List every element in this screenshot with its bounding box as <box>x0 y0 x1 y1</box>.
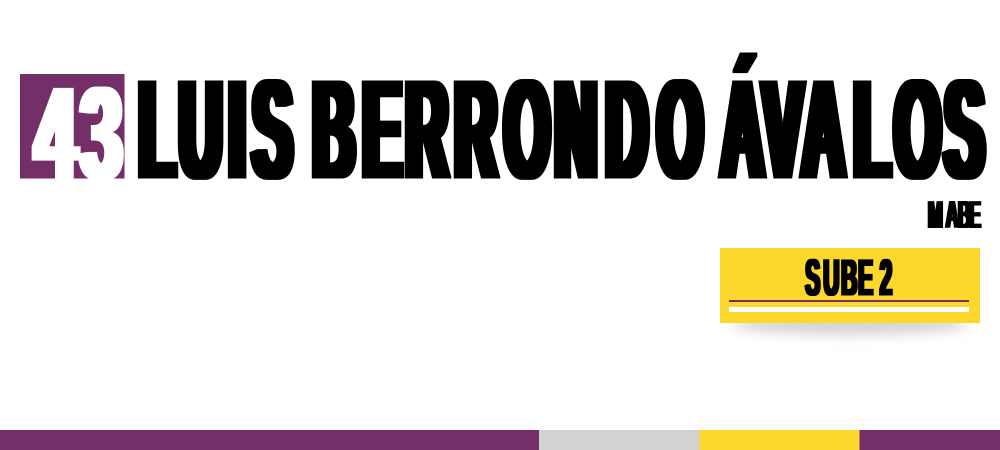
title: name: LUIS <box>139 50 292 208</box>
status ribbon: SUBE 2: SUBE 2 <box>805 250 892 307</box>
status ribbon: SUBE 2 <box>720 248 980 323</box>
bottom colour bar <box>0 430 1000 450</box>
party label: MABE: MABE <box>928 195 981 237</box>
ribbon shadow <box>732 313 968 335</box>
number badge: 43: 43 <box>35 59 122 207</box>
title: name: BERRONDO <box>313 50 703 208</box>
title: name <box>139 50 984 208</box>
title: name: ÁVALOS <box>721 50 984 208</box>
